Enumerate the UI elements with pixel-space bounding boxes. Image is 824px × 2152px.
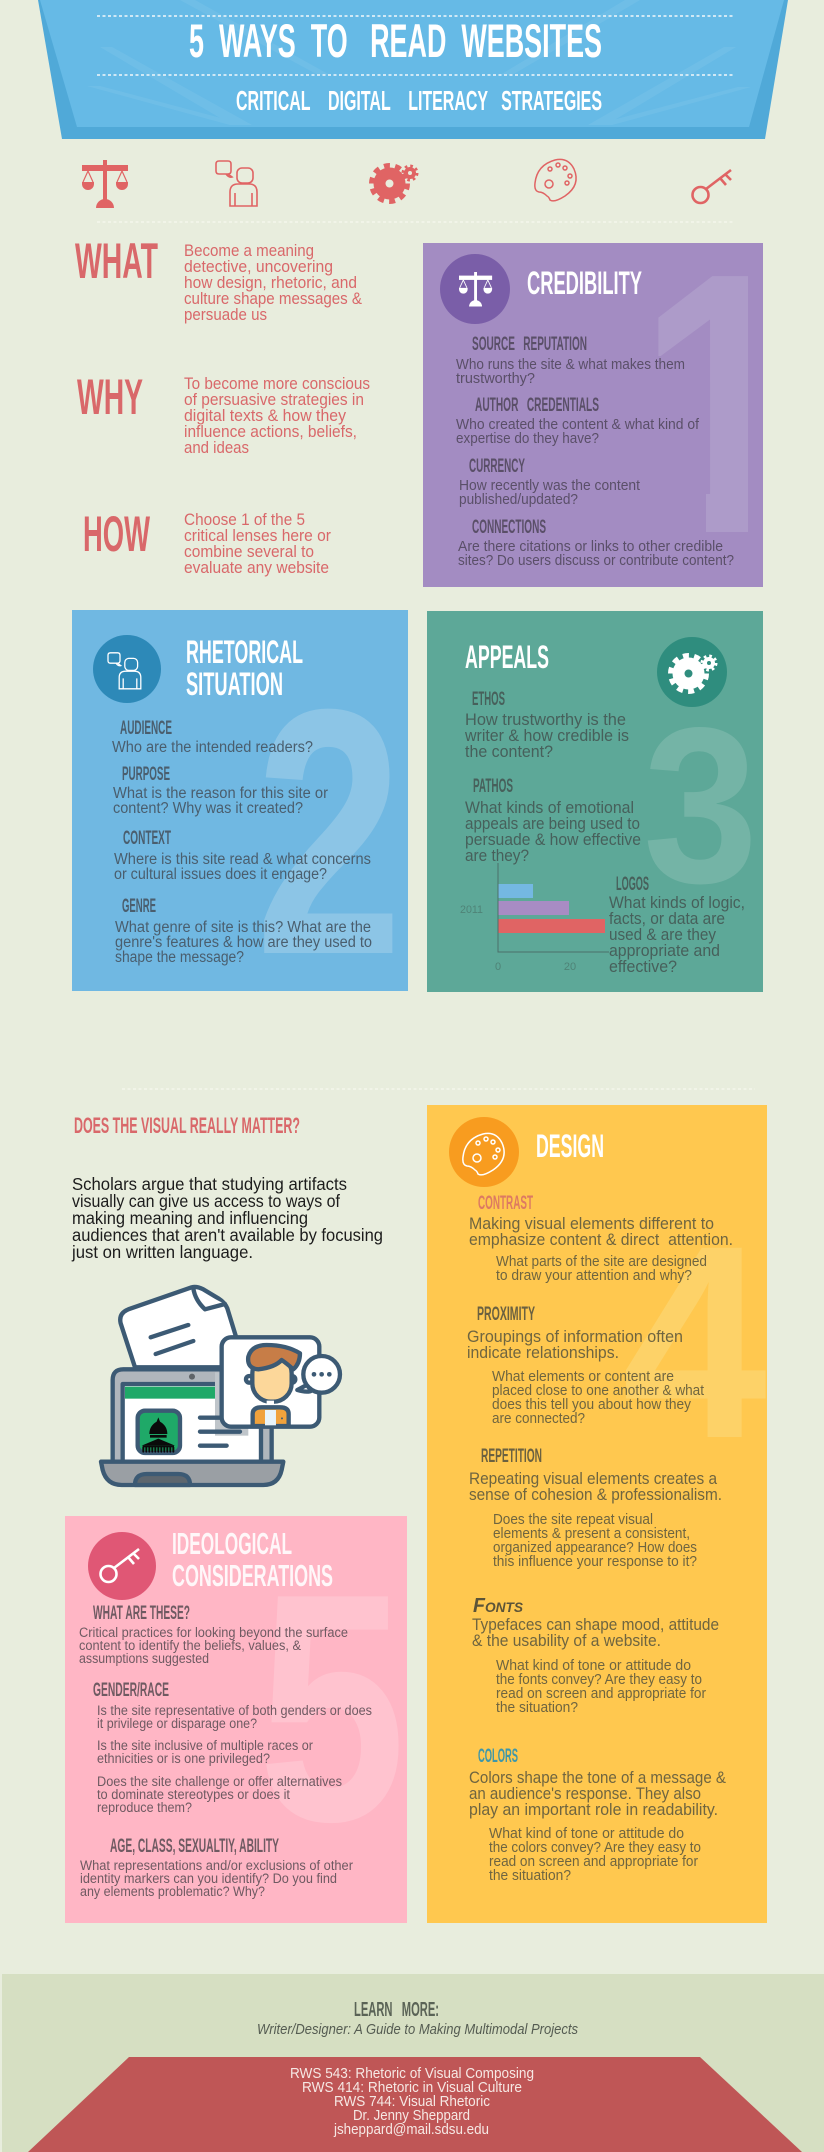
text block: scholars argue: visually can give us access to ways of — [72, 1191, 340, 1211]
ideological considerations heading — [172, 1526, 333, 1593]
ideological items: ethnicities or is one privileged? — [97, 1751, 270, 1766]
rhetorical items: CONTEXT — [123, 828, 171, 849]
appeals items: appeals are being used to — [465, 815, 640, 833]
credibility items: AUTHOR CREDENTIALS — [475, 395, 599, 416]
heading: does the visual really matter: DOES THE VISUAL REALLY MATTER? — [74, 1113, 300, 1138]
learn more heading: LEARN MORE: — [354, 1999, 439, 2021]
what text: Become a meaning — [184, 242, 314, 260]
design questions: organized appearance? How does — [493, 1540, 697, 1556]
appeals items: are they? — [465, 847, 529, 865]
bar chart: 0 — [495, 961, 501, 973]
panel: rhetorical situation — [72, 610, 408, 1028]
design questions: to draw your attention and why? — [496, 1268, 692, 1284]
ideological items: it privilege or disparage one? — [97, 1716, 257, 1731]
rhetorical items: or cultural issues does it engage? — [114, 866, 327, 883]
appeals items: persuade & how effective — [465, 831, 641, 849]
header banner — [38, 0, 788, 139]
course and contact list: RWS 744: Visual Rhetoric — [334, 2093, 490, 2110]
design questions: this influence your response to it? — [493, 1554, 697, 1570]
design main statements: Making visual elements different to — [469, 1215, 714, 1233]
panel: credibility — [423, 243, 763, 587]
icon: palette — [535, 159, 576, 201]
how text: evaluate any website — [184, 559, 329, 577]
design questions: does this tell you about how they — [492, 1397, 692, 1413]
bar chart: 2011 — [460, 904, 483, 916]
ideological items: any elements problematic? Why? — [80, 1884, 265, 1899]
rhetorical items: genre's features & how are they used to — [115, 934, 372, 951]
credibility items: SOURCE REPUTATION — [472, 334, 587, 355]
design questions: the situation? — [496, 1700, 578, 1716]
design labels: REPETITION — [481, 1446, 542, 1467]
ideological considerations heading: CONSIDERATIONS — [172, 1558, 333, 1593]
icon: key — [88, 1532, 156, 1600]
big number 3: 3 — [643, 682, 758, 930]
design main statements: play an important role in readability. — [469, 1801, 718, 1819]
appeals items: LOGOS — [616, 874, 649, 895]
icon: gears — [372, 166, 417, 202]
what text: culture shape messages & — [184, 290, 362, 308]
rhetorical items: Where is this site read & what concerns — [114, 851, 371, 868]
text block: scholars argue: audiences that aren't available by focusing — [72, 1225, 383, 1245]
how text: combine several to — [184, 543, 314, 561]
design main statements: Colors shape the tone of a message & — [469, 1769, 726, 1787]
credibility items: Are there citations or links to other credible — [458, 539, 723, 555]
credibility items: published/updated? — [459, 492, 578, 508]
why text: and ideas — [184, 439, 249, 457]
icon: person with speech bubble — [216, 161, 257, 206]
course and contact list — [290, 2065, 534, 2138]
panel: design — [427, 1105, 769, 1923]
icon: rhetorical person — [93, 635, 161, 703]
credibility items — [456, 334, 734, 569]
design questions: the fonts convey? Are they easy to — [496, 1672, 702, 1688]
design questions: are connected? — [492, 1411, 585, 1427]
ideological items: assumptions suggested — [79, 1651, 209, 1666]
rhetorical items — [112, 718, 372, 966]
design labels: CONTRAST — [478, 1193, 533, 1214]
rhetorical items: GENRE — [122, 896, 156, 917]
icon row — [82, 159, 731, 208]
text block: scholars argue — [71, 1174, 383, 1262]
design main statements — [467, 1215, 733, 1819]
design questions: What elements or content are — [492, 1369, 674, 1385]
appeals items: What kinds of logic, — [609, 894, 745, 912]
design main statements: Typefaces can shape mood, attitude — [472, 1616, 719, 1634]
appeals heading: APPEALS — [465, 639, 549, 675]
why text: influence actions, beliefs, — [184, 423, 357, 441]
rhetorical situation heading: RHETORICAL — [186, 634, 303, 670]
credibility items: CONNECTIONS — [472, 517, 546, 538]
ideological items: WHAT ARE THESE? — [93, 1603, 190, 1624]
fonts label: Fonts — [473, 1595, 524, 1617]
design questions — [489, 1254, 707, 1884]
why text: digital texts & how they — [184, 407, 347, 425]
credibility items: CURRENCY — [469, 456, 525, 477]
icon: appeals gears — [657, 637, 727, 707]
big number 4: 4 — [622, 1189, 769, 1496]
appeals items: the content? — [465, 743, 553, 761]
design questions: the colors convey? Are they easy to — [489, 1840, 701, 1856]
credibility items: trustworthy? — [456, 371, 535, 387]
panel: appeals — [427, 611, 763, 992]
why heading: WHY — [77, 369, 143, 425]
what text: how design, rhetoric, and — [184, 274, 357, 292]
what text — [184, 242, 362, 324]
how text: critical lenses here or — [184, 527, 331, 545]
ideological items: reproduce them? — [97, 1800, 192, 1815]
text block: scholars argue: Scholars argue that studying artifacts — [72, 1174, 347, 1194]
design questions: What parts of the site are designed — [496, 1254, 707, 1270]
illustration: laptop, document and person — [101, 1287, 340, 1485]
ideological items: Is the site inclusive of multiple races or — [97, 1738, 313, 1753]
design questions: read on screen and appropriate for — [496, 1686, 706, 1702]
how text: Choose 1 of the 5 — [184, 511, 305, 529]
credibility items: How recently was the content — [459, 478, 640, 494]
design labels — [477, 1193, 542, 1767]
course and contact list: jsheppard@mail.sdsu.edu — [333, 2121, 489, 2138]
how heading: HOW — [83, 506, 150, 562]
rhetorical items: AUDIENCE — [120, 718, 172, 739]
rhetorical items: What genre of site is this? What are the — [115, 919, 371, 936]
icon: palette — [449, 1117, 519, 1187]
appeals items: How trustworthy is the — [465, 711, 626, 729]
why text: of persuasive strategies in — [184, 391, 364, 409]
design main statements: Repeating visual elements creates a — [469, 1470, 718, 1488]
ideological items: content to identify the beliefs, values, & — [79, 1638, 301, 1653]
ideological items: identity markers can you identify? Do you find — [80, 1871, 337, 1886]
ideological items: What representations and/or exclusions of other — [80, 1858, 353, 1873]
credibility items: expertise do they have? — [456, 431, 599, 447]
course and contact list: RWS 414: Rhetoric in Visual Culture — [302, 2079, 522, 2096]
appeals items: PATHOS — [473, 776, 513, 797]
why text: To become more conscious — [184, 375, 370, 393]
appeals items: used & are they — [609, 926, 717, 944]
credibility heading: CREDIBILITY — [527, 265, 642, 301]
rhetorical items: What is the reason for this site or — [113, 785, 328, 802]
text block: scholars argue: just on written language. — [71, 1242, 253, 1262]
what text: detective, uncovering — [184, 258, 333, 276]
ideological items: Critical practices for looking beyond the surface — [79, 1625, 348, 1640]
ideological items: AGE, CLASS, SEXUALTIY, ABILITY — [110, 1836, 279, 1857]
panel: ideological considerations — [65, 1516, 407, 1923]
appeals items: What kinds of emotional — [465, 799, 634, 817]
big number 2: 2 — [255, 637, 403, 1028]
design questions: elements & present a consistent, — [493, 1526, 690, 1542]
design main statements: Groupings of information often — [467, 1328, 683, 1346]
appeals items: appropriate and — [609, 942, 720, 960]
rhetorical items: PURPOSE — [122, 764, 170, 785]
footer — [2, 1974, 824, 2152]
ideological items: Does the site challenge or offer alternatives — [97, 1774, 342, 1789]
design main statements: indicate relationships. — [467, 1344, 619, 1362]
credibility items: Who runs the site & what makes them — [456, 357, 685, 373]
appeals items: effective? — [609, 958, 677, 976]
design questions: placed close to one another & what — [492, 1383, 704, 1399]
design heading: DESIGN — [536, 1128, 604, 1164]
big number 5: 5 — [258, 1526, 406, 1889]
design questions: the situation? — [489, 1868, 571, 1884]
design questions: What kind of tone or attitude do — [489, 1826, 684, 1842]
design questions: What kind of tone or attitude do — [496, 1658, 691, 1674]
ideological items: to dominate stereotypes or does it — [97, 1787, 290, 1802]
ideological items: Is the site representative of both genders or does — [97, 1703, 372, 1718]
rhetorical items: Who are the intended readers? — [112, 739, 313, 756]
bar chart: 20 — [564, 961, 576, 973]
design main statements: sense of cohesion & professionalism. — [469, 1486, 722, 1504]
book reference: Writer/Designer: A Guide to Making Multimodal Projects — [257, 2021, 578, 2038]
design main statements: an audience's response. They also — [469, 1785, 701, 1803]
icon: key — [692, 170, 731, 203]
what heading: WHAT — [75, 233, 158, 289]
what text: persuade us — [184, 306, 267, 324]
rhetorical situation heading — [186, 634, 303, 702]
why text — [184, 375, 370, 457]
bar chart — [460, 863, 609, 973]
design main statements: & the usability of a website. — [472, 1632, 661, 1650]
icon: scales — [82, 160, 128, 208]
design questions: Does the site repeat visual — [493, 1512, 653, 1528]
design labels: PROXIMITY — [477, 1304, 535, 1325]
appeals items: writer & how credible is — [464, 727, 629, 745]
rhetorical situation heading: SITUATION — [186, 666, 283, 702]
rhetorical items: content? Why was it created? — [113, 800, 303, 817]
text block: scholars argue: making meaning and influencing — [72, 1208, 308, 1228]
ideological items — [79, 1603, 372, 1899]
design main statements: emphasize content & direct attention. — [469, 1231, 733, 1249]
appeals items: facts, or data are — [609, 910, 725, 928]
credibility items: Who created the content & what kind of — [456, 417, 700, 433]
appeals items: ETHOS — [472, 689, 505, 710]
icon: credibility scales — [440, 254, 510, 324]
design labels: COLORS — [478, 1746, 518, 1767]
appeals items — [464, 689, 745, 976]
ideological considerations heading: IDEOLOGICAL — [172, 1526, 292, 1561]
course and contact list: Dr. Jenny Sheppard — [353, 2107, 470, 2124]
credibility items: sites? Do users discuss or contribute content? — [458, 553, 734, 569]
rhetorical items: shape the message? — [115, 949, 244, 966]
how text — [184, 511, 331, 577]
course and contact list: RWS 543: Rhetoric of Visual Composing — [290, 2065, 534, 2082]
ideological items: GENDER/RACE — [93, 1680, 169, 1701]
what why how column — [75, 233, 370, 577]
design questions: read on screen and appropriate for — [489, 1854, 698, 1870]
